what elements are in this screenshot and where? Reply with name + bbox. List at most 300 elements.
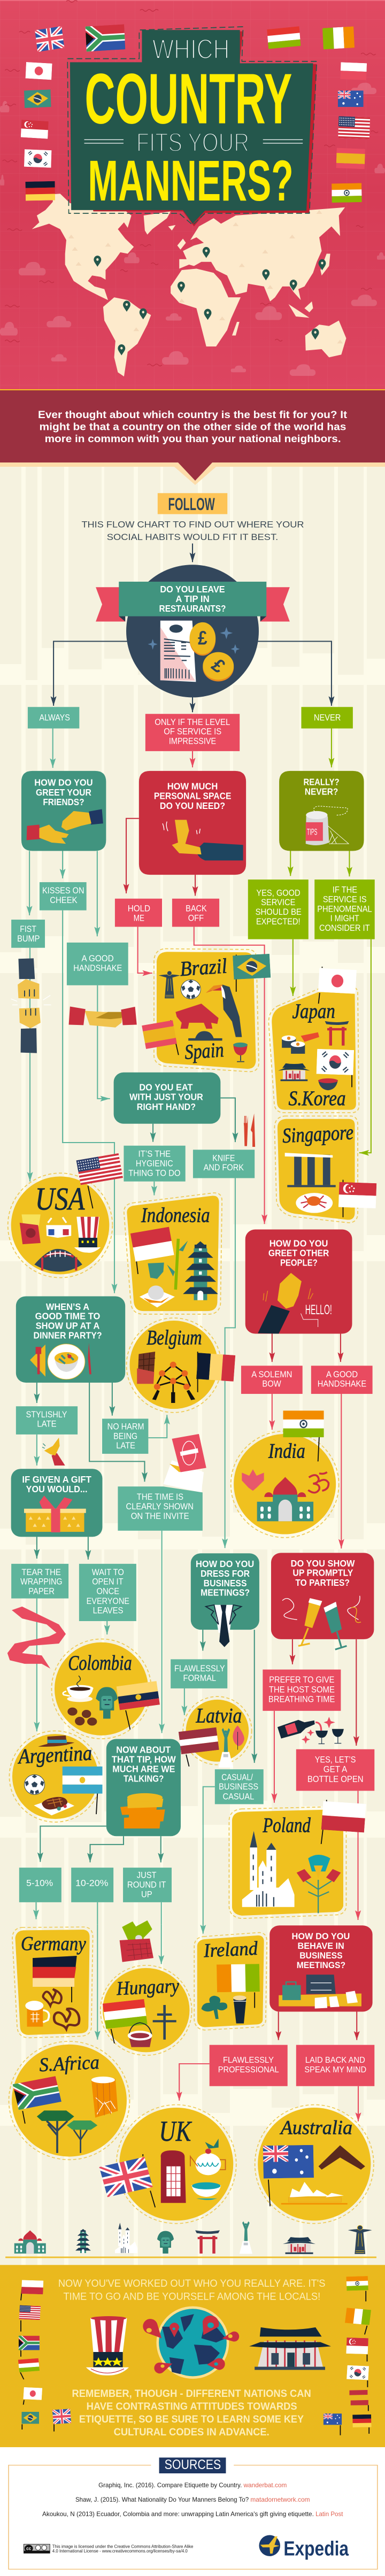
panel: Brazil and Spain [142,948,271,1071]
answer: fist bump: FIST [20,924,36,934]
answer: yes good service: EXPECTED! [256,916,301,927]
answer: casual business casual: CASUAL [222,1792,254,1801]
intro band: might be that a country on the other side of the world has [40,421,346,433]
question: how do you behave in business meetings: HOW DO YOU [292,1932,350,1941]
background: cream flow chart area [0,465,385,2266]
flag: Australia [263,2145,314,2206]
answer: yes let's get a bottle open: YES, LET’S [315,1755,356,1765]
title board [67,27,317,226]
sources panel [0,2447,385,2576]
icon: folk flower [297,1855,341,1913]
icon: torn ribbon [7,1607,66,1669]
answer: 10-20%: 10-20% [75,1878,109,1888]
flag: UK [99,2154,155,2207]
flag: Spain [142,1020,179,1055]
question: how do you greet other people: PEOPLE? [280,1258,318,1268]
icon: marina bay [285,1153,336,1187]
source references [42,2481,343,2518]
expedia logo [259,2535,349,2560]
text: closing message: TIME TO GO AND BE YOURSELF AMONG THE LOCALS! [63,2290,320,2302]
answer: no harm being late: LATE [116,1440,135,1451]
panel: Colombia: Colombia [68,1651,132,1675]
answer: only if service impressive [145,714,240,751]
answer: just round it up: JUST [137,1870,157,1880]
flag: Germany [33,1956,77,2002]
question: how do you dress for business meetings [191,1553,259,1647]
panel: Australia [255,2105,374,2224]
panel: Brazil and Spain: Spain [184,1038,225,1064]
text: reminder: ETIQUETTE, SO BE SURE TO LEARN SOME KEY [79,2413,304,2425]
icon: sparkles [148,627,240,654]
question: now about that tip: THAT TIP, HOW [112,1754,176,1764]
follow label [158,493,227,514]
answer: wait to open: LEAVES [93,1606,124,1616]
landmark strip [5,2222,376,2258]
icon: wine pouring [278,1717,344,1744]
answer: stylishly late [16,1406,78,1434]
answer: no harm being late: NO HARM [107,1422,144,1431]
answer: yes let's get a bottle open [296,1749,374,1791]
icon: lotus [242,1469,264,1491]
question: do you eat with just your right hand: WITH JUST YOUR [129,1092,203,1102]
text: reminder: CULTURAL CODES IN ADVANCE. [114,2426,270,2438]
icon: ok hand [42,1438,65,1466]
question: how do you behave in business meetings: BEHAVE IN [298,1941,344,1951]
answer: no harm being late: BEING [113,1431,137,1441]
answer: the time is shown on invite: ON THE INVITE [131,1511,189,1521]
question: how much personal space: HOW MUCH [167,781,218,792]
icon: coffee beans [67,1708,97,1726]
flag: South Korea [317,1049,354,1087]
flag: India [283,1410,324,1461]
icon: coins: £ [207,654,229,677]
answer: flawlessly professional: PROFESSIONAL [218,2065,279,2074]
question: do you leave a tip: RESTAURANTS? [159,603,226,614]
icon: handshake [69,1007,137,1028]
question: how do you behave in business meetings [270,1925,373,2011]
icon: invitation [163,1434,206,1492]
icon: suit and tie [206,1605,241,1647]
intro instruction text: SOCIAL HABITS WOULD FIT IT BEST. [107,532,278,542]
icon: bull [175,1004,219,1029]
map pins [94,247,326,356]
icon: waving hand [258,1273,313,1334]
panel: Indonesia: Indonesia [141,1203,210,1227]
source references: Latin Post [315,2510,343,2518]
flags: right column [324,2276,372,2435]
panel: Ireland: Ireland [203,1938,259,1962]
intro band [0,389,385,485]
panel: Argentina: Argentina [17,1741,93,1768]
question: how do you greet other people: HOW DO YOU [270,1238,328,1249]
answer: it's the hygienic thing: HYGIENIC [136,1159,173,1169]
panel: Hungary: Hungary [116,1975,180,2000]
icon: uncle sam hat [74,1217,101,1253]
answer: always: ALWAYS [39,713,70,723]
expedia logo: Expedia [283,2537,349,2560]
question: now about that tip: MUCH ARE WE [112,1764,175,1775]
answer: prefer to give host time: THE HOST SOME [269,1685,335,1694]
question: if given a gift: YOU WOULD... [26,1484,87,1494]
flag: Japan [318,967,357,1004]
answer: hold me [115,899,162,927]
panel: India [231,1410,339,1538]
question: when's a good time [16,1296,125,1383]
icon: layered cakes [148,1263,164,1279]
flags: left column [18,2280,71,2432]
icon: pint glass [233,1995,247,2023]
answer: stylishly late: LATE [37,1419,57,1429]
panel: India: India [268,1439,305,1463]
answer: only if service impressive: IMPRESSIVE [169,736,216,746]
question: if given a gift [11,1469,102,1537]
question: when's a good time: DINNER PARTY? [33,1330,102,1340]
icon: soup bowl [318,1078,338,1090]
panel: Germany [12,1927,93,2038]
question: how do you greet other people [245,1229,352,1334]
question: when's a good time: GOOD TIME TO [35,1311,100,1322]
icon: drum [91,2077,118,2118]
answer: prefer to give host time: PREFER TO GIVE [269,1675,334,1685]
answer: a solemn bow: BOW [262,1379,281,1389]
sources heading: SOURCES [165,2457,221,2472]
flag: Argentina [63,1767,102,1814]
panel: Singapore [274,1116,376,1223]
icon: champagne toast [282,1596,361,1649]
question: really never: REALLY? [304,777,340,788]
answer: back off: BACK [186,904,207,913]
answer: if service phenomenal: PHENOMENAL [317,904,372,914]
panel: South Africa: S.Africa [38,2052,100,2076]
panel: Latvia [179,1696,252,1768]
answer: knife and fork: AND FORK [204,1162,244,1173]
panel: Belgium [126,1318,235,1413]
flow lines: third level [36,1599,358,1925]
text: reminder [72,2387,311,2438]
icon: cross [153,2005,176,2040]
question: now about that tip [106,1739,181,1836]
answer: it's the hygienic thing [124,1146,186,1182]
answer: prefer to give host time [263,1670,341,1711]
flags around title [21,24,370,203]
panel: Japan and South Korea: S.Korea [289,1086,346,1110]
flow lines: first level [29,819,371,1293]
answer: it's the hygienic thing: THING TO DO [128,1168,181,1178]
answer: it's the hygienic thing: IT’S THE [138,1149,171,1159]
answer: yes let's get a bottle open: BOTTLE OPEN [307,1774,364,1784]
icon: toucan [206,984,242,1037]
answer: prefer to give host time: BREATHING TIME [268,1694,335,1704]
answer: flawlessly professional [210,2045,288,2086]
answer: laid back and speak my mind [296,2045,374,2086]
text: reminder: HAVE CONTRASTING ATTITUDES TOWARDS [87,2401,297,2412]
answer: flawlessly professional: FLAWLESSLY [223,2056,274,2065]
answer: yes good service: SHOULD BE [256,907,302,917]
panel: UK: UK [159,2116,192,2147]
answer: kisses on cheek: KISSES ON [42,885,84,896]
clouds and waves decoration [0,1,385,376]
answer: 5-10% [19,1868,61,1902]
answer: flawlessly formal [171,1659,227,1688]
icon: acacia trees [37,2110,97,2153]
answer: a good handshake [67,943,128,985]
answer: only if service impressive: ONLY IF THE LEVEL [155,717,230,727]
icon: oak leaf [233,1725,244,1750]
source references: Shaw, J. (2015). What Nationality Do Your Manners Belong To? [75,2496,249,2503]
question: how do you dress for business meetings: HOW DO YOU [196,1559,254,1569]
question: if given a gift: IF GIVEN A GIFT [22,1474,91,1485]
licence text: This image is licensed under the Creative Commons Attribution-Share Alike [52,2544,193,2549]
question: how do you behave in business meetings: MEETINGS? [297,1961,345,1970]
answer: fist bump: BUMP [17,934,40,944]
panel: Poland [229,1800,366,1918]
answer: wait to open: ONCE [96,1586,119,1596]
question: how do you greet your friends: GREET YOUR [36,787,91,798]
answer: if service phenomenal: I MIGHT [330,913,359,923]
text: reminder: REMEMBER, THOUGH - DIFFERENT NATIONS CAN [72,2387,311,2400]
panel: Germany: Germany [21,1933,86,1955]
panel: Singapore: Singapore [282,1120,354,1147]
icon: atomium [152,1362,195,1403]
answer: back off [172,899,219,927]
panel: Belgium: Belgium [147,1325,202,1349]
icon: om symbol [308,1472,328,1493]
licence text: 4.0 International License - www.creativecommons.org/licenses/by-sa/4.0 [52,2549,188,2554]
flag: Belgium [196,1352,235,1392]
question: how do you dress for business meetings: DRESS FOR [201,1568,250,1579]
answer: knife and fork: KNIFE [212,1153,235,1163]
question: how do you greet your friends: FRIENDS? [43,797,84,807]
answer: if service phenomenal: CONSIDER IT [319,923,370,933]
answer: flawlessly formal: FLAWLESSLY [174,1663,225,1673]
answer: 10-20% [71,1868,113,1902]
flag: Brazil [233,954,271,992]
answer: if service phenomenal [314,880,375,939]
answer: fist bump [11,920,45,948]
flow lines: second level [37,1178,341,1733]
icon: stop hand [163,820,243,860]
panel: Australia: Australia [279,2117,352,2139]
flag: South Africa [12,2075,61,2124]
icon: greeting hands [27,809,103,844]
answer: tear the wrapping paper: TEAR THE [21,1567,61,1577]
icon: globe with pins [143,2307,239,2379]
icon: opera house [281,2182,348,2204]
answer: 5-10%: 5-10% [26,1878,53,1888]
question: do you show up promptly: UP PROMPTLY [292,1568,353,1578]
answer: laid back and speak my mind: LAID BACK AND [305,2056,365,2065]
panel: closing banner [0,2265,385,2447]
flag: USA [76,1153,123,1208]
answer: tear the wrapping paper [11,1564,68,1599]
answer: a good handshake (2) [311,1366,373,1394]
answer: just round it up: ROUND IT [127,1880,166,1890]
icon: korean palace [249,2327,331,2370]
question: really never: NEVER? [305,786,338,797]
answer: yes good service: YES, GOOD [256,888,301,898]
answer: a good handshake: HANDSHAKE [73,963,122,973]
flow lines: final level [97,1925,358,2122]
question: how much personal space: PERSONAL SPACE [154,791,232,801]
panel: South Africa [9,2041,129,2159]
icon: pretzels and beer [25,1989,79,2029]
question: how do you greet other people: HELLO! [305,1302,332,1317]
arrows from start [53,544,332,768]
title: Fits your: FITS YOUR [136,127,249,157]
intro instruction text: THIS FLOW CHART TO FIND OUT WHERE YOUR [81,520,304,530]
icon: dinner plate [30,1343,91,1379]
question: how do you greet your friends [21,771,106,851]
question: do you eat with just your right hand: RIGHT HAND? [137,1101,196,1112]
answer: a good handshake (2): HANDSHAKE [318,1379,366,1389]
icon: fork and knife [243,1114,255,1147]
answer: laid back and speak my mind: SPEAK MY MIND [304,2065,366,2074]
panel: Brazil and Spain: Brazil [179,954,228,981]
answer: yes good service [248,880,309,939]
panel: Indonesia [124,1193,222,1314]
panel: Colombia [51,1639,160,1739]
question: how do you greet your friends: HOW DO YOU [34,777,93,788]
icon: coin stack [120,1793,165,1829]
icon: american football [34,1249,82,1271]
icon: coins [190,622,234,682]
icon: wine glass [233,1043,248,1062]
icon: crab [296,1193,333,1213]
icon: goulash pot [128,2023,152,2047]
icon: tea cup [191,2182,221,2200]
answer: wait to open: WAIT TO [92,1567,124,1577]
flag: Poland [321,1800,366,1844]
icon: rice dish [140,1285,175,1307]
question: how do you behave in business meetings: BUSINESS [299,1951,343,1961]
flag: Ireland [217,1964,260,2008]
question: how much personal space: DO YOU NEED? [160,800,225,811]
answer: flawlessly formal: FORMAL [183,1673,216,1683]
flag: Indonesia [130,1227,174,1274]
source references: Graphiq, Inc. (2016). Compare Etiquette by Country. [98,2481,242,2489]
question: do you leave a tip [96,565,290,697]
icon: sushi [282,1032,319,1054]
answer: back off: OFF [188,913,204,923]
icon: phone box [161,2150,186,2203]
panel: Poland: Poland [263,1813,311,1837]
answer: stylishly late: STYLISHLY [26,1409,67,1420]
icon: steak [34,1797,74,1815]
text: closing message [58,2277,325,2302]
question: do you leave a tip: DO YOU LEAVE [160,584,225,595]
icon: tip jar [306,806,349,845]
panel: Japan and South Korea: Japan [292,999,335,1023]
answer: casual business casual: BUSINESS [219,1781,258,1792]
source references: Akoukou, N (2013) Ecuador, Colombia and more: unwrapping Latin America's gift giving etiquette. [42,2510,314,2518]
answer: never [301,707,353,728]
question: do you show up promptly [271,1553,374,1649]
question: do you leave a tip: A TIP IN [175,593,210,604]
icon: shamrock [202,1996,227,2019]
icon: bamboo [167,1239,188,1290]
icon: meeting table [279,1975,361,2009]
answer: hold me: HOLD [128,904,150,913]
answer: only if service impressive: OF SERVICE IS [164,727,221,737]
icon: wallet with cash [120,1921,153,1962]
world map [32,194,346,376]
answer: the time is shown on invite [118,1486,203,1531]
answer: just round it up [123,1868,172,1902]
icon: uncle sam hat [86,2316,129,2376]
panel: USA [8,1153,123,1278]
question: do you show up promptly: TO PARTIES? [295,1577,350,1588]
question: now about that tip: NOW ABOUT [116,1745,171,1755]
answer: tear the wrapping paper: PAPER [28,1586,55,1596]
flag: Colombia [117,1681,160,1730]
text: closing message: NOW YOU'VE WORKED OUT WHO YOU REALLY ARE. IT'S [58,2277,325,2289]
answer: knife and fork [193,1150,255,1178]
icon: 3D glasses [46,1217,71,1238]
answer: kisses on cheek: CHEEK [50,895,78,905]
icon: chocolate [137,1352,155,1384]
question: how do you greet other people: GREET OTHER [268,1248,329,1258]
answer: just round it up: UP [141,1889,152,1899]
flag: Latvia [179,1727,219,1767]
question: do you eat with just your right hand [114,1073,220,1124]
answer: the time is shown on invite: THE TIME IS [137,1492,183,1502]
source references: matadornetwork.com [250,2496,310,2503]
licence text [52,2544,193,2554]
question: how do you dress for business meetings: BUSINESS [204,1578,247,1588]
panel: Japan and South Korea [268,967,359,1113]
answer: a solemn bow: A SOLEMN [251,1369,292,1379]
answer: never: NEVER [314,713,341,723]
answer: yes let's get a bottle open: GET A [324,1764,348,1775]
answer: kisses on cheek [40,882,87,911]
answer: hold me: ME [134,913,144,923]
icon: gaucho hat [38,1736,74,1747]
panel: Hungary [101,1965,192,2055]
answer: yes good service: SERVICE [261,897,295,907]
intro band: Ever thought about which country is the best fit for you? It [38,409,348,421]
panel: USA: USA [35,1182,85,1217]
icon: coins: £ [198,627,207,649]
answer: if service phenomenal: IF THE [333,885,357,895]
question: how do you dress for business meetings: MEETINGS? [201,1587,250,1598]
icon: coffee cup [63,1676,93,1702]
answer: a good handshake (2): A GOOD [326,1369,358,1379]
panel: UK [99,2105,236,2224]
icon: fist bump [11,958,51,1053]
creative commons badge [24,2544,50,2553]
panel: Latvia: Latvia [196,1703,242,1727]
icon: gift [24,1495,86,1532]
flag: Hungary [103,1999,148,2043]
title: Which: WHICH [152,34,229,65]
icon: teapot [190,2139,226,2175]
answer: casual business casual: CASUAL/ [221,1772,253,1782]
answer: always [28,707,79,728]
icon: fries [20,1214,41,1244]
answer: no harm being late [102,1418,148,1454]
title: Manners?: MANNERS? [88,148,294,213]
intro instruction text [81,520,304,542]
answer: wait to open: OPEN IT [92,1577,124,1587]
question: really never [279,771,364,851]
answer: wait to open [79,1564,136,1621]
question: when's a good time: WHEN’S A [46,1301,89,1312]
icon: matador hat [188,1031,222,1040]
panel: Argentina [9,1731,102,1822]
follow label: FOLLOW [168,495,215,514]
answer: a solemn bow [241,1366,303,1394]
panel: Ireland [194,1933,267,2030]
